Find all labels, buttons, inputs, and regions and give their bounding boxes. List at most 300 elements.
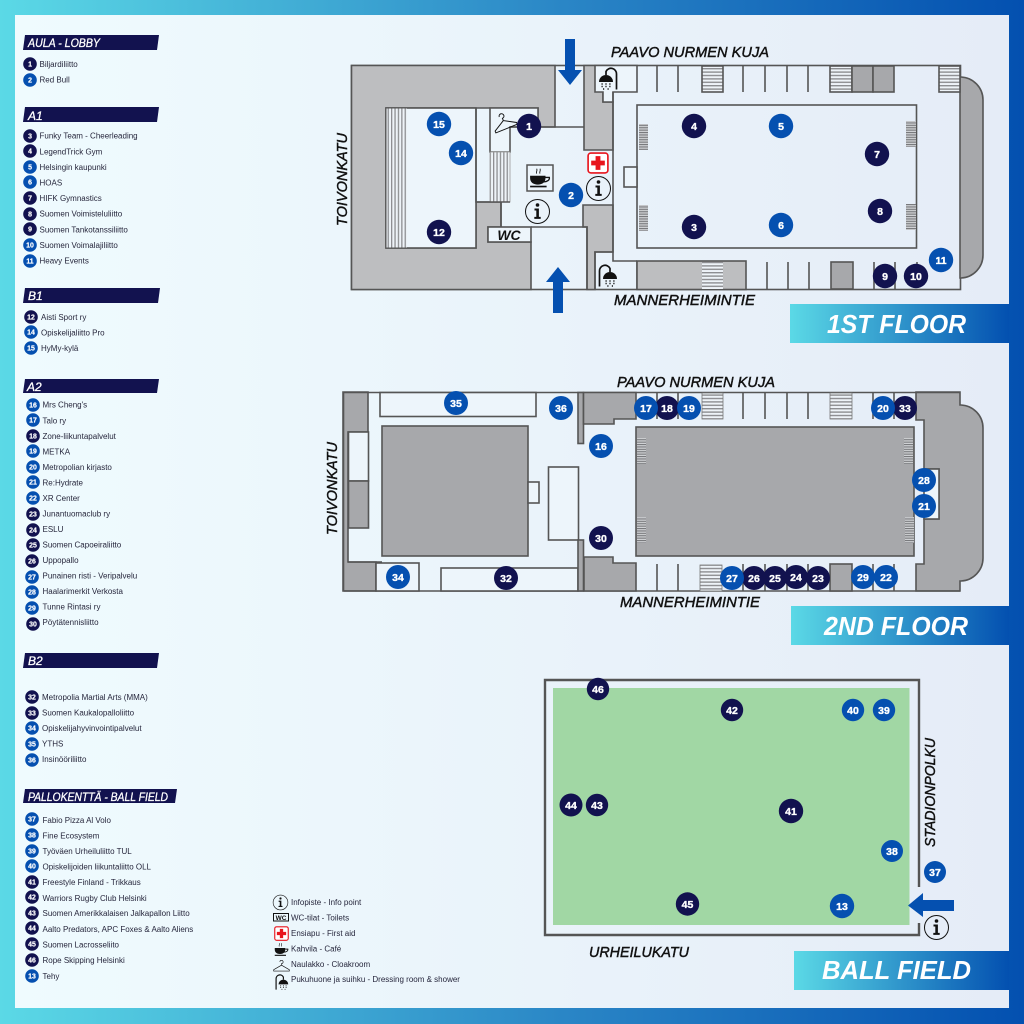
entry 33: Suomen Kaukalopalloliitto (42, 708, 135, 718)
niche (924, 469, 939, 519)
marker 8 (868, 199, 892, 223)
marker 19: 19 (683, 403, 695, 415)
marker 16: 16 (595, 441, 607, 453)
entry 30: Pöytätennisliitto (42, 618, 99, 627)
key: dressing room and shower (276, 975, 460, 990)
marker 14: 14 (455, 148, 467, 160)
entry 7: 7 (28, 196, 32, 202)
entry 13: Tehy (42, 972, 59, 981)
right gray bulge (960, 77, 983, 278)
marker 9 (873, 264, 897, 288)
entry 22: 22 (29, 496, 37, 502)
entry 23 (26, 507, 110, 521)
north stairs (702, 66, 960, 92)
entry 3 (23, 129, 138, 143)
entry 12: Aisti Sport ry (41, 313, 86, 322)
marker 34: 34 (392, 572, 404, 584)
lobby outline (476, 108, 584, 227)
entry 45 (25, 937, 120, 951)
marker 39 (873, 699, 895, 721)
entry 23: 23 (29, 512, 37, 518)
entry 21: 21 (29, 480, 37, 486)
marker 26: 26 (748, 573, 760, 585)
entry 45: Suomen Lacrosseliito (42, 940, 120, 950)
entry 38: 38 (28, 832, 36, 840)
entry 40: 40 (28, 864, 36, 870)
entry 18: Zone-liikuntapalvelut (42, 432, 117, 441)
entry 7: HIFK Gymnastics (40, 194, 102, 203)
north entrance arrow (558, 39, 582, 85)
entry 3: Funky Team - Cheerleading (40, 132, 138, 141)
entry 33 (25, 706, 135, 720)
marker 42 (721, 699, 743, 721)
heading: A2 (23, 379, 159, 394)
entry 6: 6 (28, 180, 32, 186)
marker 46 (587, 678, 609, 700)
entry 39 (25, 844, 132, 858)
marker 28 (912, 468, 936, 492)
north pillar (578, 392, 584, 444)
entry 22 (26, 491, 80, 505)
marker 37 (924, 861, 946, 883)
north stores (852, 66, 894, 92)
legend section: Pallokenttä - Ball field (23, 789, 193, 983)
marker 30 (589, 526, 613, 550)
marker 4: 4 (691, 121, 697, 133)
marker 2: 2 (568, 190, 574, 202)
room 35 (380, 392, 536, 416)
key: cloakroom (274, 960, 370, 971)
marker 32: 32 (500, 573, 512, 585)
entry 36 (25, 753, 87, 767)
entry 11 (23, 254, 89, 268)
entry 13 (25, 969, 59, 983)
entry 24: ESLU (42, 525, 64, 534)
entry 1: 1 (28, 62, 32, 68)
entry 27 (25, 570, 137, 584)
building outline (344, 392, 960, 591)
heading: Aula - Lobby: AULA - LOBBY (27, 36, 101, 50)
entry 35: YTHS (42, 740, 63, 748)
marker 12: 12 (433, 227, 445, 239)
marker 21: 21 (918, 501, 930, 513)
street: Mannerheimintie: MANNERHEIMINTIE (620, 594, 761, 611)
entry 29: 29 (28, 606, 36, 612)
marker 41 (779, 799, 803, 823)
marker 40: 40 (847, 705, 859, 717)
entry 29 (25, 601, 100, 615)
entry 28: 28 (28, 590, 36, 596)
entry 26: 26 (28, 558, 36, 566)
entry 41 (25, 875, 141, 889)
entry 10 (23, 238, 118, 252)
marker 6 (769, 213, 793, 237)
entry 21: Re:Hydrate (42, 478, 84, 488)
hall door box (624, 167, 637, 187)
marker 24 (784, 565, 808, 589)
street: Paavo Nurmen Kuja: PAAVO NURMEN KUJA (611, 44, 769, 61)
marker 44 (560, 794, 582, 816)
auditorium box (528, 482, 539, 503)
entry 19: 19 (29, 448, 37, 456)
banner: ball field (794, 951, 1009, 990)
marker 26 (742, 566, 766, 590)
marker 16 (589, 434, 613, 458)
entry 40 (25, 859, 152, 873)
south stalls (767, 262, 917, 289)
marker 46: 46 (592, 684, 604, 696)
street: Mannerheimintie: MANNERHEIMINTIE (614, 292, 756, 309)
banner: ball field: BALL FIELD (822, 955, 971, 985)
entrance arrow (908, 893, 954, 917)
banner: 1st floor: 1ST FLOOR (827, 309, 966, 339)
WC room (488, 227, 531, 243)
hall stairs (637, 438, 914, 543)
entry 33: 33 (28, 710, 36, 718)
entry 10: Suomen Voimalajiliitto (40, 241, 118, 250)
entry 38: Fine Ecosystem (42, 832, 100, 840)
marker 5 (769, 114, 793, 138)
heading: B2: B2 (28, 654, 43, 668)
marker 39: 39 (878, 705, 890, 717)
marker 7 (865, 142, 889, 166)
key: cafe (275, 943, 342, 956)
entry 7 (23, 191, 102, 205)
entry 13: 13 (28, 974, 36, 980)
entry 10: 10 (26, 242, 34, 250)
banner: 2nd floor (791, 606, 1009, 645)
banner: 1st floor (790, 304, 1009, 343)
entry 23: Junantuomaclub ry (42, 510, 110, 518)
entry 20: 20 (29, 464, 37, 472)
legend section: A1 (23, 107, 159, 268)
entry 39: Työväen Urheiluliitto TUL (42, 847, 132, 856)
marker 27: 27 (726, 573, 738, 585)
entry 36: 36 (28, 758, 36, 764)
entry 32: Metropolia Martial Arts (MMA) (42, 693, 148, 702)
marker 19 (677, 396, 701, 420)
marker 40 (842, 699, 864, 721)
marker 18: 18 (661, 403, 673, 415)
entry 14 (24, 325, 105, 339)
marker 6: 6 (778, 220, 784, 232)
first aid (588, 153, 608, 173)
entry 14: Opiskelijaliitto Pro (41, 328, 105, 338)
key: info point (273, 895, 362, 910)
south gray rooms (637, 261, 853, 290)
auditorium gray block (382, 426, 528, 556)
marker 17 (634, 396, 658, 420)
south stalls and stairs (657, 564, 894, 591)
entry 42: 42 (28, 894, 36, 902)
heading: A2: A2 (26, 380, 42, 394)
north stalls and stairs (657, 392, 894, 419)
marker 37: 37 (929, 867, 941, 879)
entry 9 (23, 222, 128, 236)
heading: Pallokenttä - Ball field: PALLOKENTTÄ - BALL FIELD (28, 790, 168, 804)
entry 1: Biljardiliitto (40, 60, 78, 69)
west small rooms (348, 432, 382, 562)
floor plan: 2nd floor (324, 374, 983, 611)
symbol key (273, 895, 460, 990)
marker 43 (586, 794, 608, 816)
marker 21 (912, 494, 936, 518)
entry 16: 16 (29, 402, 37, 410)
entry 12: 12 (27, 314, 35, 322)
marker 2 (559, 183, 583, 207)
key: first aid (275, 927, 355, 940)
entry 18 (26, 429, 117, 443)
entry 6: HOAS (40, 178, 62, 188)
street: Urheilukatu: URHEILUKATU (589, 944, 689, 961)
entry 2: 2 (28, 78, 32, 84)
marker 43: 43 (591, 800, 603, 812)
heading: A1: A1 (27, 109, 43, 123)
entry 1 (23, 57, 78, 71)
marker 27 (720, 566, 744, 590)
entrance hall (531, 227, 587, 289)
entry 20 (26, 460, 112, 474)
entry 38 (25, 828, 100, 842)
marker 15 (427, 112, 451, 136)
cafe icon (527, 165, 553, 191)
entry 41: Freestyle Finland - Trikkaus (42, 878, 141, 887)
key: dressing room and shower: Pukuhuone ja suihku - Dressing room & shower (291, 975, 460, 984)
entry 37: Fabio Pizza Al Volo (42, 816, 112, 825)
entry 42 (25, 890, 147, 904)
shower room north (595, 66, 637, 102)
cloakroom (490, 108, 538, 152)
marker 14 (449, 141, 473, 165)
entry 8: Suomen Voimisteluliitto (40, 210, 123, 219)
marker 13: 13 (836, 901, 848, 913)
legend section: B1 (23, 288, 160, 355)
east gray block (916, 392, 983, 591)
marker 32 (494, 566, 518, 590)
info point (586, 176, 610, 200)
entry 4: LegendTrick Gym (40, 147, 103, 156)
marker 22 (874, 565, 898, 589)
marker 4 (682, 114, 706, 138)
marker 35: 35 (450, 398, 462, 410)
entry 34: Opiskelijahyvinvointipalvelut (42, 724, 142, 733)
west gray block (352, 66, 555, 290)
green pitch (553, 688, 910, 925)
auditorium stairs (386, 108, 407, 248)
north stalls (657, 65, 960, 92)
heading: A1 (23, 107, 159, 123)
entry 29: Tunne Rintasi ry (42, 602, 100, 612)
marker 41: 41 (785, 806, 797, 818)
entry 9: Suomen Tankotanssiliitto (40, 225, 128, 234)
legend column (23, 35, 193, 983)
entry 37: 37 (28, 816, 36, 824)
south-east gray block (584, 557, 636, 591)
info point (924, 916, 948, 940)
entry 30: 30 (29, 622, 37, 628)
room outline (548, 467, 578, 540)
marker 10: 10 (910, 271, 922, 283)
entry 44: 44 (28, 926, 36, 932)
marker 33 (893, 396, 917, 420)
entry 17 (26, 413, 66, 427)
entry 4: 4 (28, 148, 32, 156)
entry 28: Haalarimerkit Verkosta (42, 587, 124, 596)
legend section: A2 (23, 379, 159, 631)
marker 22: 22 (880, 572, 892, 584)
north gray block (584, 66, 613, 150)
key: info point: Infopiste - Info point (291, 898, 362, 907)
field boundary (545, 680, 919, 935)
marker 36: 36 (555, 403, 567, 415)
marker 1 (517, 114, 541, 138)
key: first aid: Ensiapu - First aid (291, 929, 355, 938)
entry 11: Heavy Events (40, 257, 89, 266)
entry 11: 11 (26, 258, 34, 266)
street: Paavo Nurmen Kuja: PAAVO NURMEN KUJA (617, 374, 775, 391)
key: toilets: WC (276, 915, 287, 922)
hall stairs (639, 121, 916, 231)
entry 2: Red Bull (40, 76, 70, 85)
entry 42: Warriors Rugby Club Helsinki (42, 894, 147, 903)
entry 30 (26, 617, 99, 631)
entry 6 (23, 175, 62, 189)
entry 9: 9 (28, 226, 32, 234)
WC room: WC (497, 227, 522, 243)
marker 45 (676, 892, 699, 916)
main hall (637, 105, 916, 248)
marker 24: 24 (790, 572, 802, 584)
entry 36: Insinööriliitto (42, 755, 87, 764)
marker 35 (444, 391, 468, 415)
entry 25: Suomen Capoeiraliitto (42, 540, 122, 550)
shower room south (595, 252, 637, 289)
entry 27: 27 (28, 574, 36, 582)
entry 17: Talo ry (42, 416, 66, 425)
entry 39: 39 (28, 848, 36, 856)
entry 3: 3 (28, 134, 32, 140)
entry 40: Opiskelijoiden liikuntaliitto OLL (42, 862, 152, 872)
marker 7: 7 (874, 149, 880, 161)
marker 3: 3 (691, 222, 697, 234)
entry 34 (25, 721, 142, 735)
marker 3 (682, 215, 706, 239)
marker 1: 1 (526, 121, 532, 133)
entry 34: 34 (28, 726, 36, 732)
entry 43: 43 (28, 910, 36, 918)
marker 5: 5 (778, 121, 784, 133)
entry 46 (25, 953, 125, 967)
entry 43 (25, 906, 190, 920)
marker 11: 11 (935, 255, 947, 267)
marker 15: 15 (433, 119, 445, 131)
marker 8: 8 (877, 206, 883, 218)
marker 13 (830, 894, 854, 918)
marker 18 (655, 396, 679, 420)
entry 25 (26, 538, 122, 552)
room 34 (376, 563, 419, 591)
entry 5 (23, 160, 107, 174)
heading: B1: B1 (28, 289, 43, 303)
entry 17: 17 (29, 418, 37, 424)
entry 2 (23, 73, 70, 87)
marker 20 (871, 396, 895, 420)
entry 35 (25, 737, 63, 751)
entry 44: Aalto Predators, APC Foxes & Aalto Aliens (42, 925, 193, 934)
entry 15: 15 (27, 346, 35, 352)
marker 30: 30 (595, 533, 607, 545)
info point lobby (526, 200, 550, 224)
entry 28 (25, 585, 124, 599)
marker 44: 44 (565, 800, 577, 812)
entry 5: 5 (28, 164, 32, 172)
marker 17: 17 (640, 403, 652, 415)
south gray block (583, 205, 613, 290)
west gray blocks (343, 392, 376, 591)
entry 24: 24 (29, 528, 37, 534)
floor plan: 1st floor (334, 39, 983, 313)
cloakroom icon (490, 110, 517, 133)
entry 32 (25, 690, 148, 704)
entry 4 (23, 144, 103, 158)
lobby stairs (490, 152, 510, 202)
entry 14: 14 (27, 330, 35, 336)
corridor outline (613, 92, 637, 261)
banner: 2nd floor: 2ND FLOOR (823, 611, 968, 641)
marker 45: 45 (682, 899, 693, 911)
entry 8 (23, 207, 123, 221)
marker 28: 28 (918, 475, 930, 487)
south pillar (578, 540, 584, 591)
marker 25: 25 (769, 573, 781, 585)
south entrance arrow (546, 267, 570, 313)
entry 19: METKA (42, 447, 71, 456)
street: Stadionpolku: STADIONPOLKU (922, 738, 939, 847)
marker 12 (427, 220, 451, 244)
entry 44 (25, 921, 193, 935)
entry 35: 35 (28, 742, 36, 748)
entry 37 (25, 812, 112, 826)
entry 16 (26, 398, 87, 412)
marker 36 (549, 396, 573, 420)
central hall (636, 427, 914, 556)
marker 25 (763, 566, 787, 590)
entry 46: Rope Skipping Helsinki (42, 956, 125, 965)
marker 23 (806, 566, 830, 590)
entry 22: XR Center (42, 494, 80, 503)
entry 15: HyMy-kylä (41, 344, 79, 353)
entry 12 (24, 310, 86, 324)
marker 10 (904, 264, 928, 288)
entry 43: Suomen Amerikkalaisen Jalkapallon Liitto (42, 909, 190, 918)
north-east gray block (584, 392, 636, 424)
street: Toivonkatu: TOIVONKATU (324, 442, 341, 535)
marker 33: 33 (899, 403, 911, 415)
key: cloakroom: Naulakko - Cloakroom (291, 960, 370, 969)
entry 19 (26, 444, 71, 458)
legend section: B2 (23, 653, 159, 767)
street: Toivonkatu: TOIVONKATU (334, 133, 351, 226)
marker 23: 23 (812, 573, 824, 585)
entry 41: 41 (28, 880, 36, 886)
entry 16: Mrs Cheng's (42, 401, 87, 410)
key: toilets: WC-tilat - Toilets (291, 914, 349, 922)
marker 20: 20 (877, 403, 889, 415)
key: cafe: Kahvila - Café (291, 944, 342, 954)
entry 25: 25 (29, 542, 37, 550)
entry 5: Helsingin kaupunki (40, 163, 107, 172)
marker 29: 29 (857, 572, 869, 584)
